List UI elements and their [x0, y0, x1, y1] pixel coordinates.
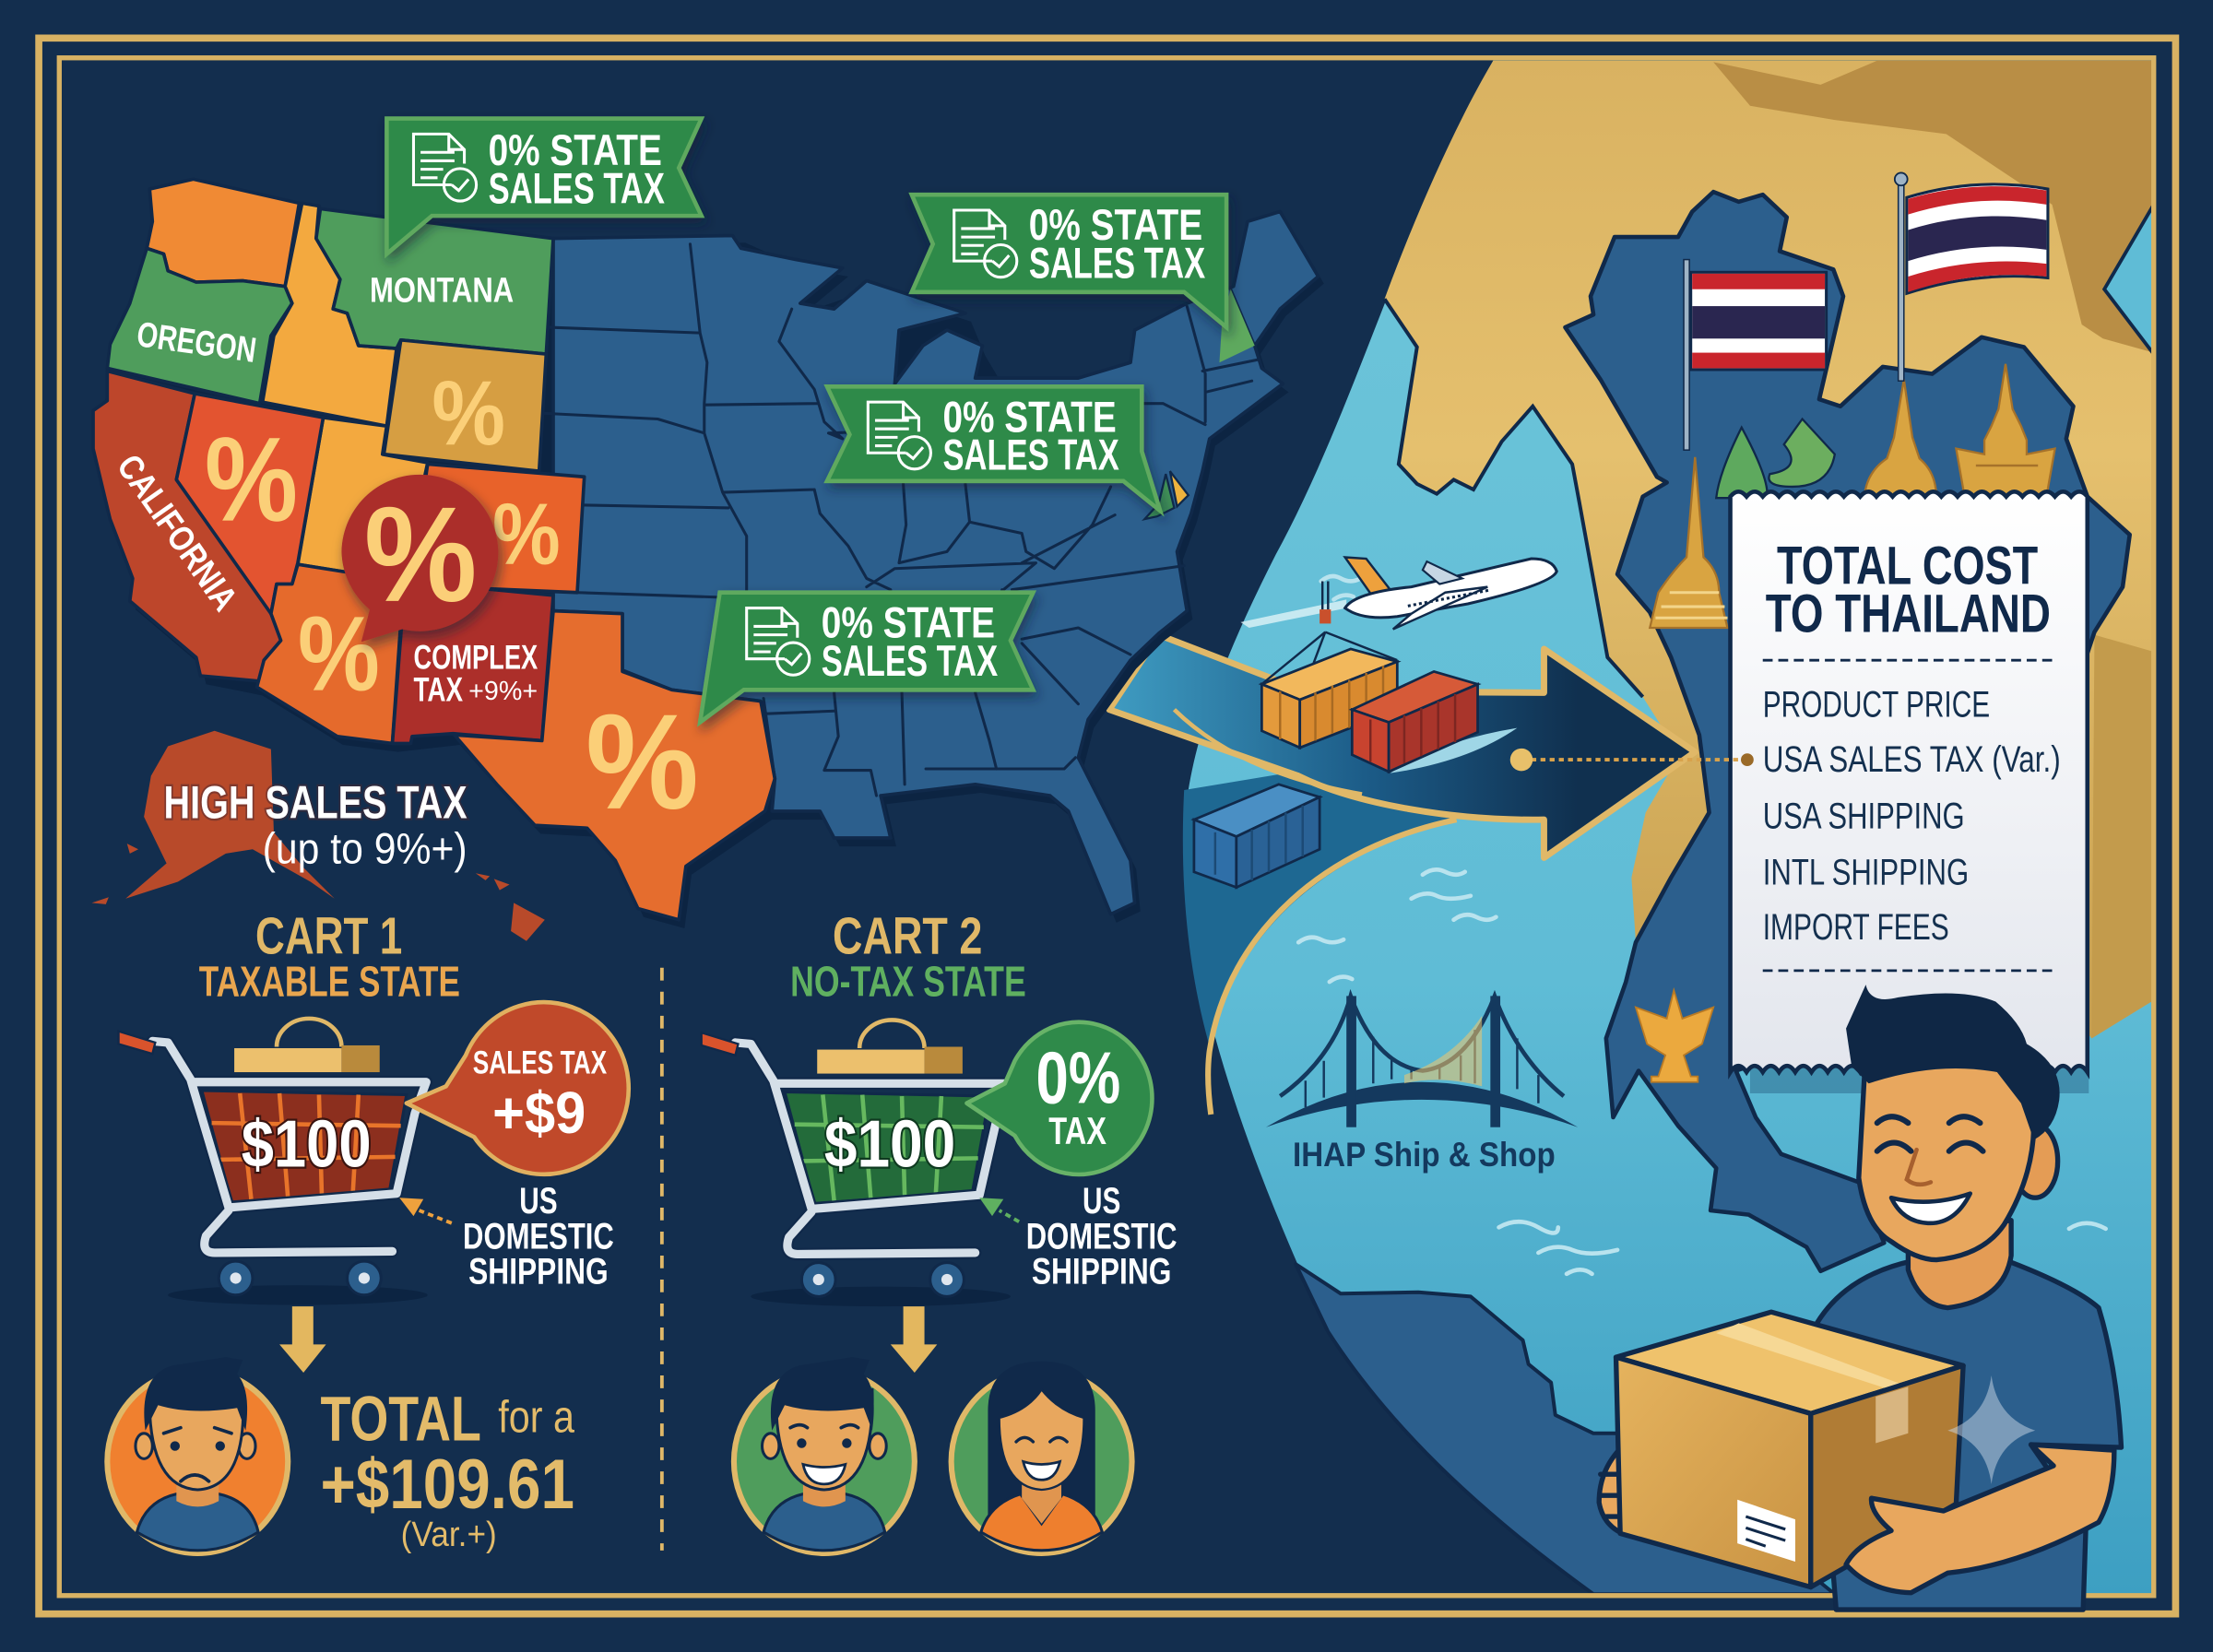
total text: +$109.61	[320, 1446, 574, 1524]
label: US domestic shipping: US	[519, 1181, 558, 1221]
total text: (Var.+)	[401, 1515, 497, 1554]
icon: bridge logo and brand	[1266, 996, 1578, 1174]
panel: cart 2 no-tax	[702, 906, 1178, 1553]
receipt line items: INTL SHIPPING	[1763, 853, 1969, 893]
decorative dark mask outside globe edge at frame	[2154, 61, 2160, 1599]
state: Alaska	[91, 731, 335, 904]
icon: red container	[1352, 671, 1478, 772]
banner text: 0% STATE	[822, 599, 995, 648]
state: New Mexico	[393, 581, 553, 743]
label: US domestic shipping: DOMESTIC	[1026, 1216, 1178, 1257]
Indonesia land	[1296, 1264, 1835, 1594]
heading: cart 2	[790, 906, 1026, 1005]
banner text: SALES TAX	[1029, 239, 1205, 288]
man hair	[1846, 985, 2060, 1139]
state: Arizona	[257, 564, 404, 743]
icon: document check	[747, 608, 810, 675]
arrow: dotted shipping pointer	[979, 1198, 1019, 1221]
waves	[1298, 576, 2106, 1274]
avatar: happy woman	[952, 1362, 1132, 1553]
banner text	[942, 393, 1119, 480]
receipt line items: USA SHIPPING	[1763, 796, 1965, 836]
heading: cart 1	[199, 906, 460, 1005]
label: US domestic shipping	[463, 1181, 614, 1292]
receipt paper	[1731, 491, 2088, 1072]
callout: 0% tax: TAX	[1048, 1110, 1106, 1152]
gold arc	[1208, 820, 1457, 1115]
icon: shopping cart	[702, 1020, 1011, 1306]
coast of Bay of Bengal	[1385, 299, 1643, 697]
receipt title: TOTAL COST	[1777, 537, 2038, 596]
receipt line items	[1763, 684, 2061, 948]
arrow: down to total	[279, 1306, 326, 1373]
gold land mass	[1385, 61, 2154, 1038]
callout: complex tax: TAX	[413, 671, 463, 709]
man shirt	[1814, 1261, 2122, 1610]
banner text: 0% STATE	[1029, 201, 1202, 250]
state: Delaware	[1170, 471, 1189, 506]
label: US domestic shipping: SHIPPING	[468, 1252, 609, 1292]
state: Colorado	[409, 464, 585, 593]
heading: high sales tax: HIGH SALES TAX	[164, 776, 467, 829]
icon: blue container	[1194, 785, 1320, 888]
callout: 0% banner Texas side	[700, 593, 1033, 723]
parcel	[1616, 1312, 1963, 1587]
state: Washington	[147, 179, 299, 287]
callout: 0% banner Montana	[386, 119, 702, 254]
man neck	[1908, 1221, 2011, 1308]
label: US domestic shipping: SHIPPING	[1032, 1252, 1171, 1292]
man eyes and brows	[1877, 1116, 1983, 1151]
heading: cart 2: NO-TAX STATE	[790, 957, 1026, 1005]
callout: sales tax +$9	[407, 1002, 629, 1174]
panel: US map	[91, 179, 1324, 941]
state: Wyoming	[384, 340, 546, 471]
icon: flat Thai flag	[1684, 260, 1827, 450]
man smile	[1891, 1194, 1970, 1223]
percent: Nevada: %	[205, 412, 298, 547]
label: US domestic shipping: US	[1083, 1181, 1120, 1221]
state: Texas	[455, 611, 775, 920]
state: Utah	[298, 418, 428, 581]
callout: 0% banner Delaware	[827, 386, 1160, 511]
receipt title	[1766, 537, 2051, 644]
callout: 0% tax: 0%	[1035, 1037, 1120, 1119]
man left hand	[1599, 1444, 1651, 1535]
callout: big percent bubble: %	[364, 479, 477, 631]
icon: crane hook	[1261, 581, 1397, 700]
banner text: SALES TAX	[822, 637, 998, 686]
state: New Hampshire	[1219, 289, 1255, 362]
man right arm and hand	[1846, 1445, 2114, 1593]
callout: complex tax: COMPLEX	[413, 638, 538, 676]
callout: 0% tax	[966, 1022, 1152, 1174]
map of Thailand	[1565, 192, 2130, 1271]
state: Montana	[316, 208, 553, 354]
icon: airplane	[1240, 557, 1556, 630]
panel: cart 1 taxable	[107, 906, 629, 1554]
callout: sales tax +$9: SALES TAX	[473, 1045, 608, 1081]
neighbouring sea inlet	[2104, 205, 2154, 354]
callout: complex tax: +9%+	[468, 677, 538, 706]
label: US domestic shipping: DOMESTIC	[463, 1216, 614, 1257]
banner text: SALES TAX	[489, 164, 665, 213]
banner text: 0% STATE	[942, 393, 1117, 442]
connector: route to sales tax line	[1510, 749, 1754, 771]
arrow: down to happy shoppers	[891, 1306, 937, 1373]
panel: Thailand globe region	[1109, 61, 2154, 1594]
total text: TOTAL	[320, 1383, 481, 1454]
receipt title: TO THAILAND	[1766, 584, 2051, 644]
total text	[320, 1383, 575, 1554]
percent: Texas: %	[586, 687, 699, 838]
icon: Garuda emblem	[1636, 990, 1713, 1082]
heading: cart 2: CART 2	[833, 906, 982, 964]
no-tax-difference states (blue)	[553, 212, 1319, 914]
state: Idaho	[263, 203, 396, 426]
label: US domestic shipping	[1026, 1181, 1178, 1292]
ocean	[1184, 61, 2154, 1594]
percent: Wyoming: %	[432, 362, 505, 465]
heading: cart 1: TAXABLE STATE	[199, 957, 460, 1005]
state: Oregon	[107, 248, 292, 404]
banner text	[1029, 201, 1205, 288]
map drop shadow	[99, 188, 1324, 928]
icon: centre stupa	[1864, 380, 1936, 498]
icon: green tree and park	[1716, 419, 1835, 498]
banner text	[822, 599, 998, 686]
receipt line items: IMPORT FEES	[1763, 907, 1949, 948]
state: California	[93, 371, 281, 681]
label: Montana: MONTANA	[370, 270, 514, 310]
callout: 0% banner New Hampshire	[912, 195, 1226, 327]
lower-left shipping lane band	[1183, 761, 1454, 1051]
panel: total cost receipt	[1510, 491, 2089, 1093]
icon: document check	[954, 210, 1017, 277]
arrow: dotted shipping pointer	[399, 1198, 452, 1223]
heading: cart 1: CART 1	[255, 906, 402, 964]
shipping label	[1737, 1500, 1795, 1562]
icon: temple	[1956, 364, 2055, 497]
avatar: happy man	[734, 1357, 915, 1553]
state: Hawaii	[476, 873, 545, 941]
heading: high sales tax: (up to 9%+)	[263, 825, 467, 874]
banner text: 0% STATE	[489, 126, 662, 175]
callout: big percent bubble	[341, 475, 498, 642]
receipt line items: USA SALES TAX (Var.)	[1763, 739, 2061, 780]
illustration: smiling man holding parcel	[1599, 985, 2122, 1610]
label: California: CALIFORNIA	[109, 448, 245, 619]
receipt shadow	[1750, 1051, 2089, 1093]
icon: document check	[413, 134, 477, 201]
man face	[1859, 1051, 2034, 1260]
callout: complex tax	[413, 638, 538, 709]
callout: sales tax +$9: +$9	[492, 1080, 586, 1146]
icon: shopping cart	[119, 1019, 428, 1305]
percent: Colorado: %	[492, 486, 561, 584]
avatar: sad shopper	[107, 1357, 288, 1553]
state: Maryland	[1144, 474, 1174, 519]
heading: high sales tax	[164, 776, 467, 874]
darker highland shading	[1713, 61, 2154, 353]
total text: for a	[498, 1392, 575, 1442]
arrow: shipping route to Thailand	[1109, 635, 1695, 857]
icon: orange container	[1261, 649, 1397, 748]
price: $100: $100	[242, 1108, 372, 1182]
man ear	[2013, 1125, 2058, 1198]
divider between carts	[661, 968, 663, 1551]
state borders	[545, 244, 1258, 796]
banner text: SALES TAX	[942, 431, 1119, 480]
icon: left stupa	[1650, 457, 1727, 628]
banner text	[489, 126, 665, 213]
sparkle	[1947, 1375, 2035, 1484]
price: $100: $100	[824, 1108, 955, 1182]
state: Nevada	[176, 394, 324, 614]
icon: document check	[868, 402, 930, 469]
label: Oregon: OREGON	[135, 314, 259, 371]
man nose	[1907, 1150, 1931, 1185]
brand name: IHAP Ship & Shop	[1293, 1136, 1556, 1174]
percent: Arizona: %	[298, 595, 380, 713]
receipt line items: PRODUCT PRICE	[1763, 684, 1990, 725]
icon: waving Thai flag	[1895, 172, 2048, 381]
